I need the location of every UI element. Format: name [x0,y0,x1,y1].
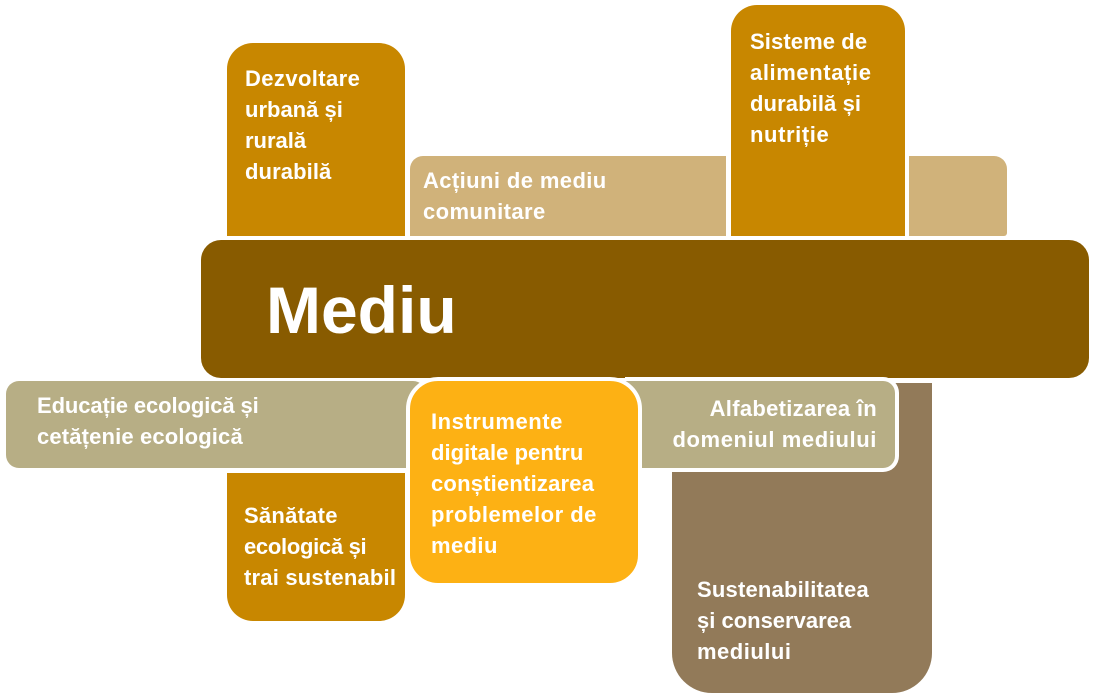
text: digital tools: mediu [431,533,498,558]
panel: sustainability and conservation [672,383,932,693]
text: digital tools: digitale pentru [431,440,583,465]
text: urban and rural development: durabilă [245,159,331,184]
text: ecological health [244,503,396,590]
text: sustainable food systems [750,29,872,147]
panel: urban and rural development [227,43,405,236]
text: urban and rural development: rurală [245,128,306,153]
text: environmental literacy: domeniul mediului [672,427,877,452]
text: urban and rural development: urbană și [245,97,343,122]
panel: ecological health [227,473,405,621]
text: ecological education: cetățenie ecologică [37,424,243,449]
text: community environmental action: comunitare [423,199,546,224]
text: environmental literacy [672,396,877,452]
text: community environmental action: Acțiuni de mediu [423,168,607,193]
text: urban and rural development [245,66,360,184]
text: digital tools: problemelor de [431,502,597,527]
text: ecological education [37,393,259,449]
heading: Mediu: Mediu [266,273,457,347]
text: sustainable food systems: alimentație [750,60,872,85]
text: sustainability and conservation: și conservarea [697,608,851,633]
panel: ecological education [6,381,426,468]
text: digital tools: conștientizarea [431,471,594,496]
panel: digital tools [406,377,642,587]
text: sustainable food systems: Sisteme de [750,29,867,54]
text: community environmental action [423,168,607,224]
panel: main heading bar [201,240,1089,378]
text: sustainability and conservation: mediului [697,639,791,664]
text: ecological education: Educație ecologică și [37,393,259,418]
text: sustainability and conservation [697,577,869,664]
text: sustainable food systems: durabilă și [750,91,861,116]
text: ecological health: ecologică și [244,534,366,559]
text: urban and rural development: Dezvoltare [245,66,360,91]
text: sustainability and conservation: Sustenabilitatea [697,577,869,602]
panel: right tan block [909,156,1007,236]
text: digital tools: Instrumente [431,409,563,434]
panel: environmental literacy [625,377,899,472]
text: ecological health: Sănătate [244,503,338,528]
text: environmental literacy: Alfabetizarea în [710,396,877,421]
panel: sustainable food systems [731,5,905,236]
text: ecological health: trai sustenabil [244,565,396,590]
text: digital tools [431,409,597,558]
panel: community environmental action [410,156,726,236]
text: sustainable food systems: nutriție [750,122,829,147]
